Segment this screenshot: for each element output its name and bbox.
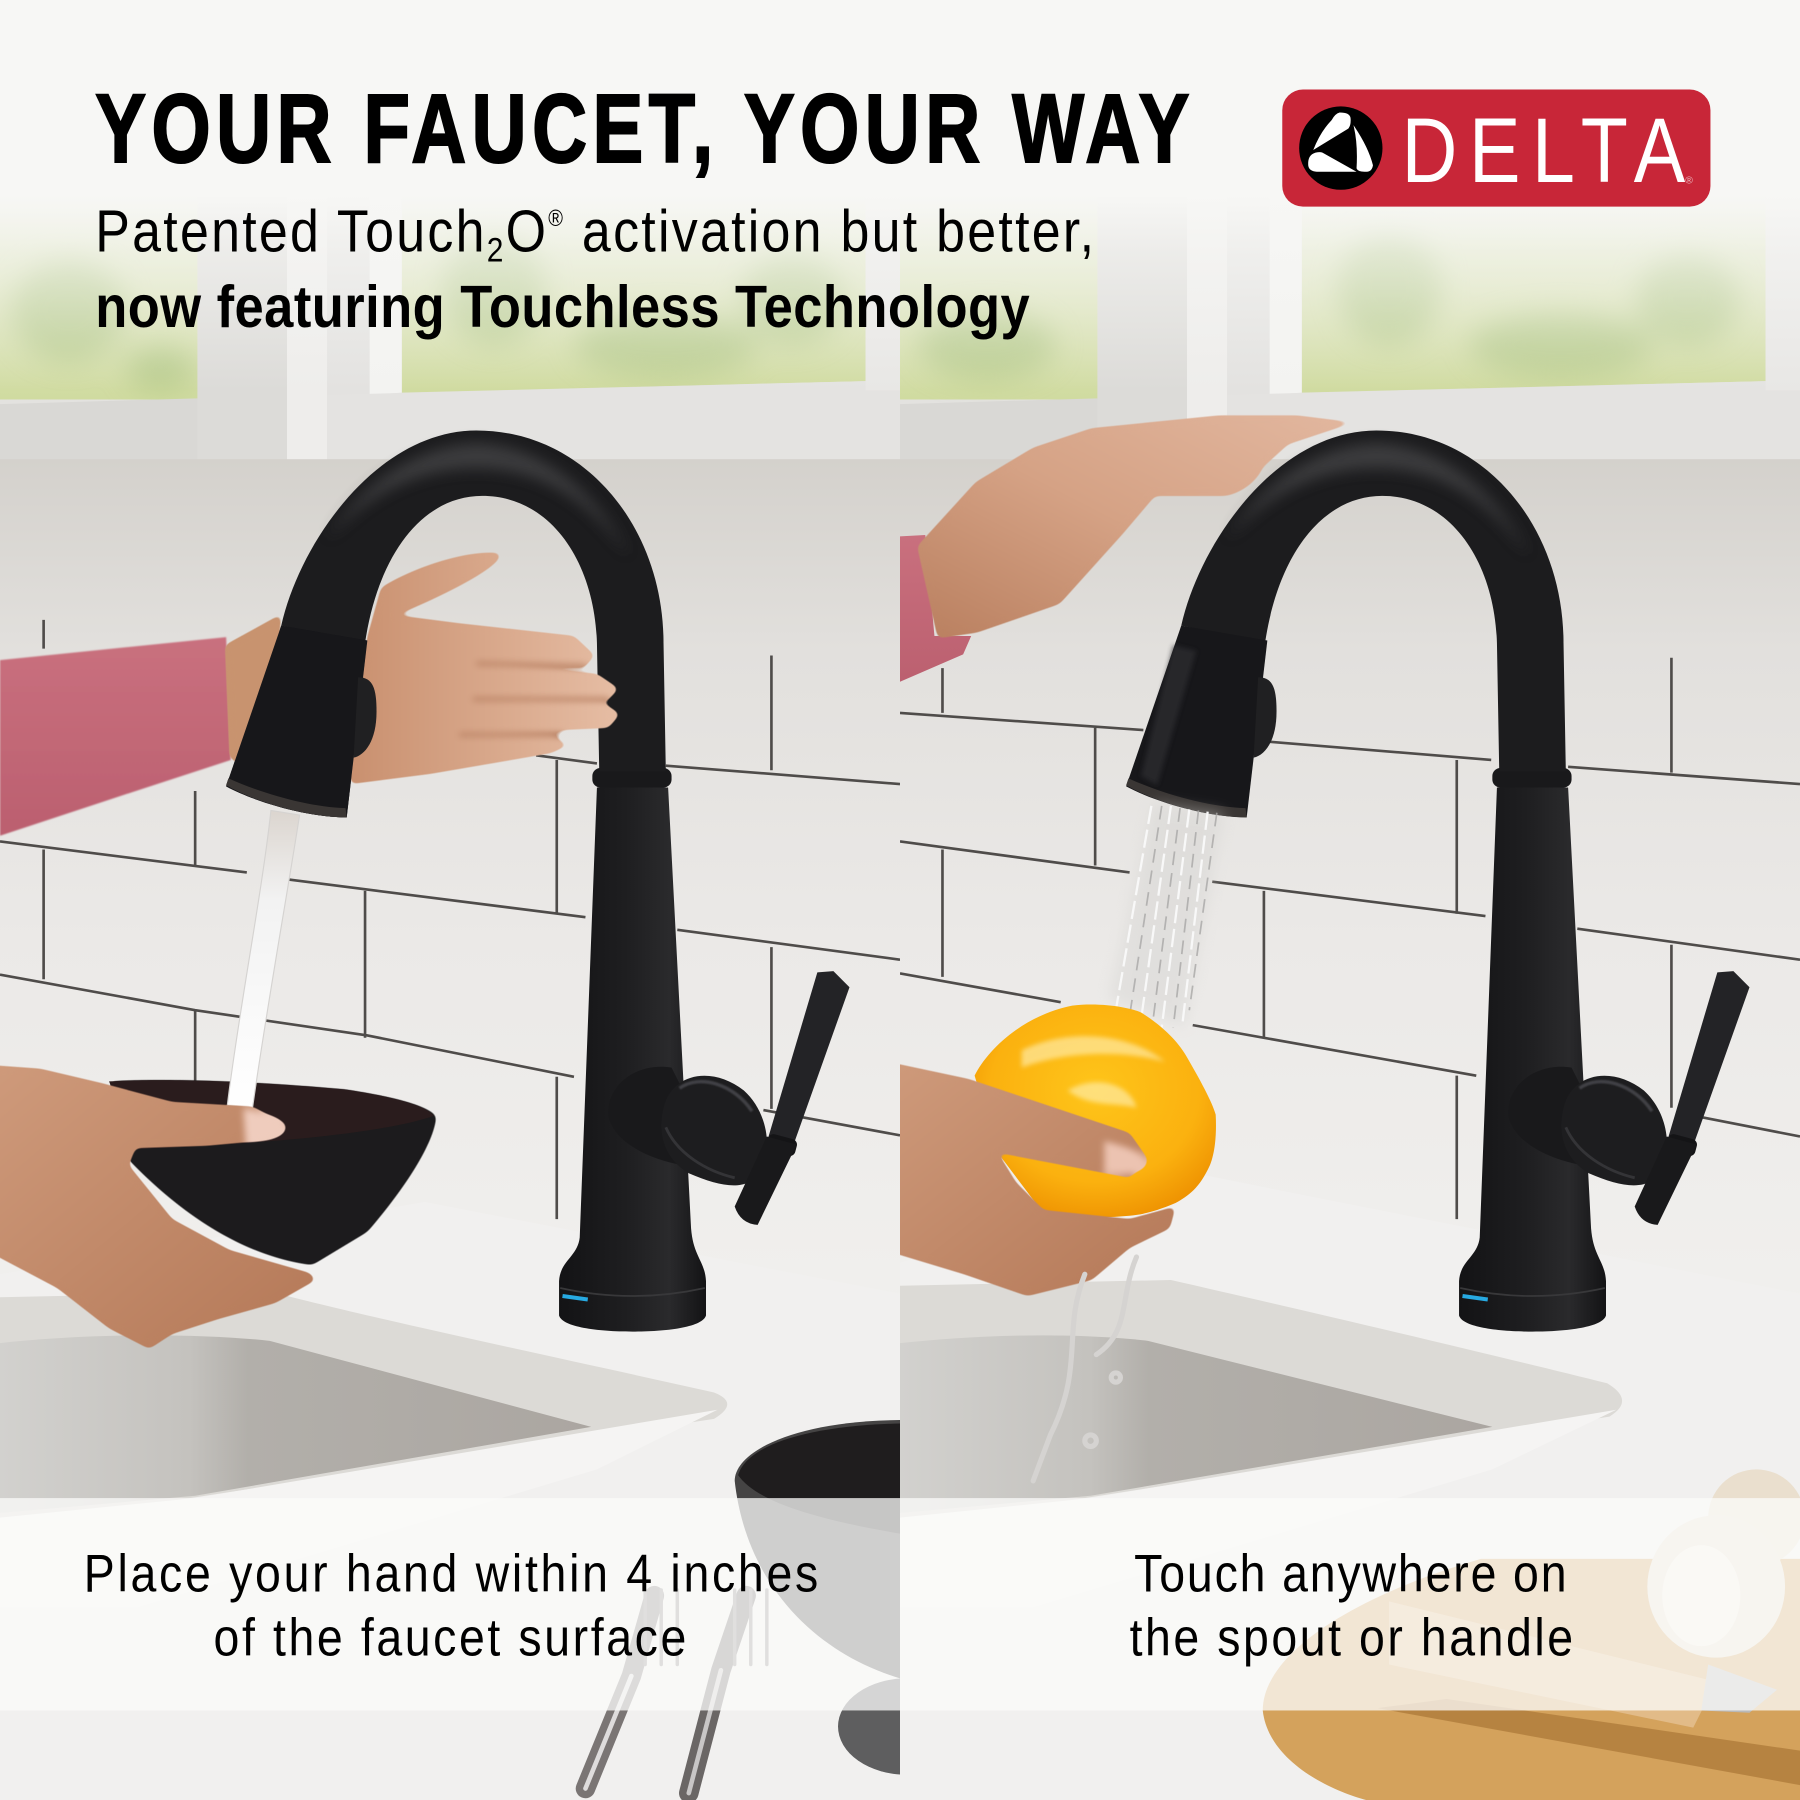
dark bowl on counter xyxy=(734,1420,900,1774)
countertop and sink xyxy=(0,1296,728,1513)
window and wall xyxy=(900,219,1800,1274)
garlic bulbs xyxy=(1647,1469,1800,1658)
hand holding pepper xyxy=(877,1060,1176,1296)
countertop and sink xyxy=(900,1280,1622,1513)
tile grout lines xyxy=(0,620,900,1219)
subtitle line one: O xyxy=(506,197,546,264)
caption band left xyxy=(0,1498,900,1710)
title: YOUR FAUCET, YOUR WAY xyxy=(95,74,1189,183)
subtitle line one: Patented Touch xyxy=(95,197,485,264)
hand touching spout xyxy=(917,416,1353,638)
subtitle line two: now featuring Touchless Technology xyxy=(95,273,1030,340)
yellow pepper xyxy=(975,1005,1216,1217)
top fade overlay xyxy=(0,0,1800,390)
water stream xyxy=(227,810,300,1108)
forks xyxy=(585,1590,767,1793)
registered mark: ® xyxy=(1685,176,1693,187)
caption: touch instruction: the spout or handle xyxy=(1130,1608,1573,1667)
caption: proximity instruction xyxy=(84,1544,818,1667)
logo: Delta xyxy=(1282,90,1710,207)
hand near faucet xyxy=(225,553,620,784)
wordmark: DELTA xyxy=(1402,99,1686,201)
handheld faucet head over hand xyxy=(226,626,377,817)
water spray xyxy=(1109,804,1224,1027)
cutting board xyxy=(1263,1559,1800,1800)
caption: proximity instruction: of the faucet surface xyxy=(214,1608,686,1667)
caption band right xyxy=(900,1498,1800,1710)
sleeve xyxy=(900,535,972,682)
caption: touch instruction: Touch anywhere on xyxy=(1134,1544,1567,1603)
sleeve xyxy=(0,637,231,836)
hand holding bowl xyxy=(0,1064,316,1349)
caption: proximity instruction: Place your hand within 4 inches xyxy=(84,1544,818,1603)
icon: Delta tripetal mark xyxy=(1299,106,1382,190)
faucet xyxy=(226,430,849,1332)
tile grout lines xyxy=(900,658,1800,1219)
faucet xyxy=(1126,430,1749,1332)
panel: proximity sensor photo xyxy=(0,219,900,1800)
subtitle line one: ® xyxy=(548,206,563,231)
black bowl xyxy=(109,1080,436,1265)
water drips xyxy=(1033,1257,1136,1481)
panel: touch activation photo xyxy=(900,219,1800,1800)
caption: touch instruction xyxy=(1130,1544,1573,1667)
subtitle line one: 2 xyxy=(487,231,503,269)
subtitle line one: activation but better, xyxy=(565,197,1094,264)
window and wall xyxy=(0,219,900,1274)
